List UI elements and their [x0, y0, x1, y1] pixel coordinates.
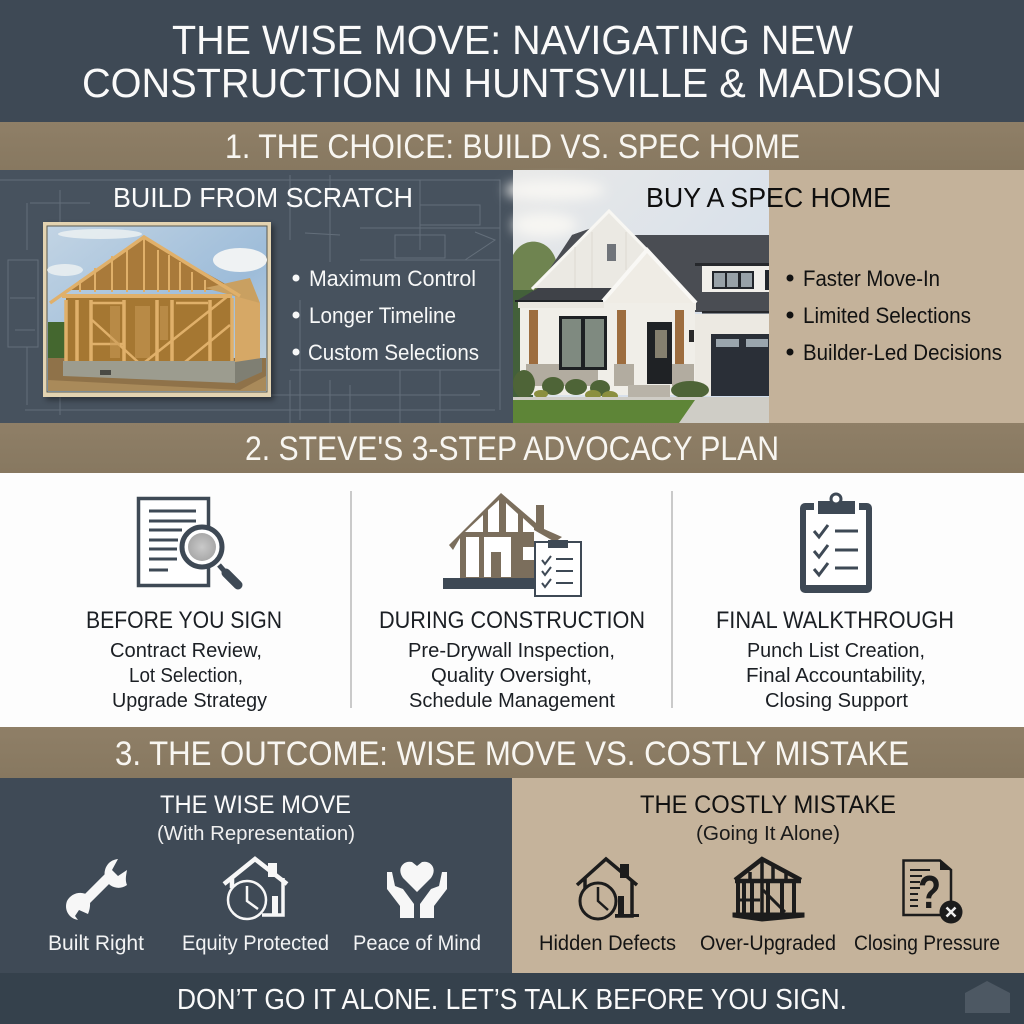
icon: house with clock: [224, 859, 287, 919]
column: final walkthrough: Punch List Creation,: [747, 640, 925, 662]
panel: buy a spec home: [505, 170, 1024, 423]
photo: house framing: [43, 222, 274, 400]
upper gable: [534, 212, 646, 288]
column: during construction: Quality Oversight,: [431, 665, 592, 687]
section heading band 3: 3. THE OUTCOME: WISE MOVE VS. COSTLY MISTAKE: [115, 735, 909, 773]
labels: risks: Closing Pressure: [854, 932, 1000, 955]
section heading band 2: 2. STEVE'S 3-STEP ADVOCACY PLAN: [245, 430, 779, 468]
labels: benefits: Peace of Mind: [353, 932, 481, 955]
column: during construction: [379, 607, 645, 712]
timber gable: [66, 238, 236, 290]
column: before you sign: [86, 607, 282, 712]
panel: the costly mistake: (Going It Alone): [696, 823, 840, 845]
column: before you sign: Contract Review,: [110, 640, 262, 662]
column: before you sign: Upgrade Strategy: [112, 690, 267, 712]
icon: document with magnifier: [138, 498, 238, 586]
heading: build from scratch: BUILD FROM SCRATCH: [113, 182, 413, 213]
panel: build from scratch: [0, 170, 513, 423]
bullet list: build: Custom Selections: [308, 340, 479, 365]
header: title banner: [0, 0, 1024, 122]
shrubs: [513, 370, 709, 399]
front gable and walls: [604, 250, 696, 310]
icon: framed house with checklist: [443, 493, 581, 596]
header: title banner: THE WISE MOVE: NAVIGATING NEW: [172, 17, 853, 63]
labels: benefits: [48, 932, 481, 955]
labels: risks: Over-Upgraded: [700, 932, 836, 955]
column: before you sign: BEFORE YOU SIGN: [86, 607, 282, 634]
heading: buy a spec home: BUY A SPEC HOME: [646, 182, 891, 213]
labels: risks: [539, 932, 1000, 955]
icon: clipboard checklist: [800, 494, 872, 593]
bullet list: build: Maximum Control: [309, 266, 476, 291]
icon: wall framing: [733, 859, 804, 921]
panel: the wise move: [0, 778, 512, 973]
column: during construction: Pre-Drywall Inspection,: [408, 640, 615, 662]
icon: house with clock dark: [577, 859, 639, 919]
bullet list: spec: Builder-Led Decisions: [803, 340, 1002, 365]
column: during construction: Schedule Management: [409, 690, 615, 712]
panel: advocacy plan: [0, 473, 1024, 727]
icon: watermark logo: [965, 981, 1010, 1013]
column: final walkthrough: FINAL WALKTHROUGH: [716, 607, 954, 634]
section heading band 1: 1. THE CHOICE: BUILD VS. SPEC HOME: [225, 128, 800, 166]
header: title banner: CONSTRUCTION IN HUNTSVILLE & MADISON: [82, 60, 942, 106]
door: [647, 322, 672, 384]
column: final walkthrough: Final Accountability,: [746, 665, 926, 687]
roof: [572, 222, 769, 312]
bullet list: spec: [786, 266, 1002, 365]
bullet list: build: [292, 266, 479, 365]
photo: finished spec house: [505, 170, 769, 423]
column: final walkthrough: Closing Support: [765, 690, 908, 712]
foundation: [63, 361, 235, 383]
panel: the costly mistake: THE COSTLY MISTAKE: [640, 791, 896, 819]
front window: [559, 316, 607, 370]
labels: benefits: Built Right: [48, 932, 144, 955]
section heading band 3: [0, 727, 1024, 778]
footer call to action: [0, 973, 1024, 1024]
column: before you sign: Lot Selection,: [129, 665, 243, 687]
panel: the costly mistake: [512, 778, 1024, 973]
dormer: [702, 265, 769, 292]
lawn and drive: [513, 397, 769, 423]
icon: wrench: [66, 859, 127, 920]
footer call to action: DON’T GO IT ALONE. LET’S TALK BEFORE YOU SIGN.: [177, 984, 847, 1016]
bullet list: spec: Faster Move-In: [803, 266, 940, 291]
icon: document with question mark: ?: [918, 866, 941, 918]
labels: benefits: Equity Protected: [182, 932, 329, 955]
labels: risks: Hidden Defects: [539, 932, 676, 955]
icon: document with question mark: [904, 860, 962, 924]
section heading band 2: [0, 423, 1024, 473]
panel: the wise move: (With Representation): [157, 823, 355, 845]
icon: hands holding heart: [387, 862, 447, 918]
bullet list: build: Longer Timeline: [309, 303, 456, 328]
column: during construction: DURING CONSTRUCTION: [379, 607, 645, 634]
column: final walkthrough: [716, 607, 954, 712]
garage: [711, 334, 769, 396]
panel: the wise move: THE WISE MOVE: [160, 791, 351, 819]
bullet list: spec: Limited Selections: [803, 303, 971, 328]
section heading band 1: [0, 122, 1024, 170]
